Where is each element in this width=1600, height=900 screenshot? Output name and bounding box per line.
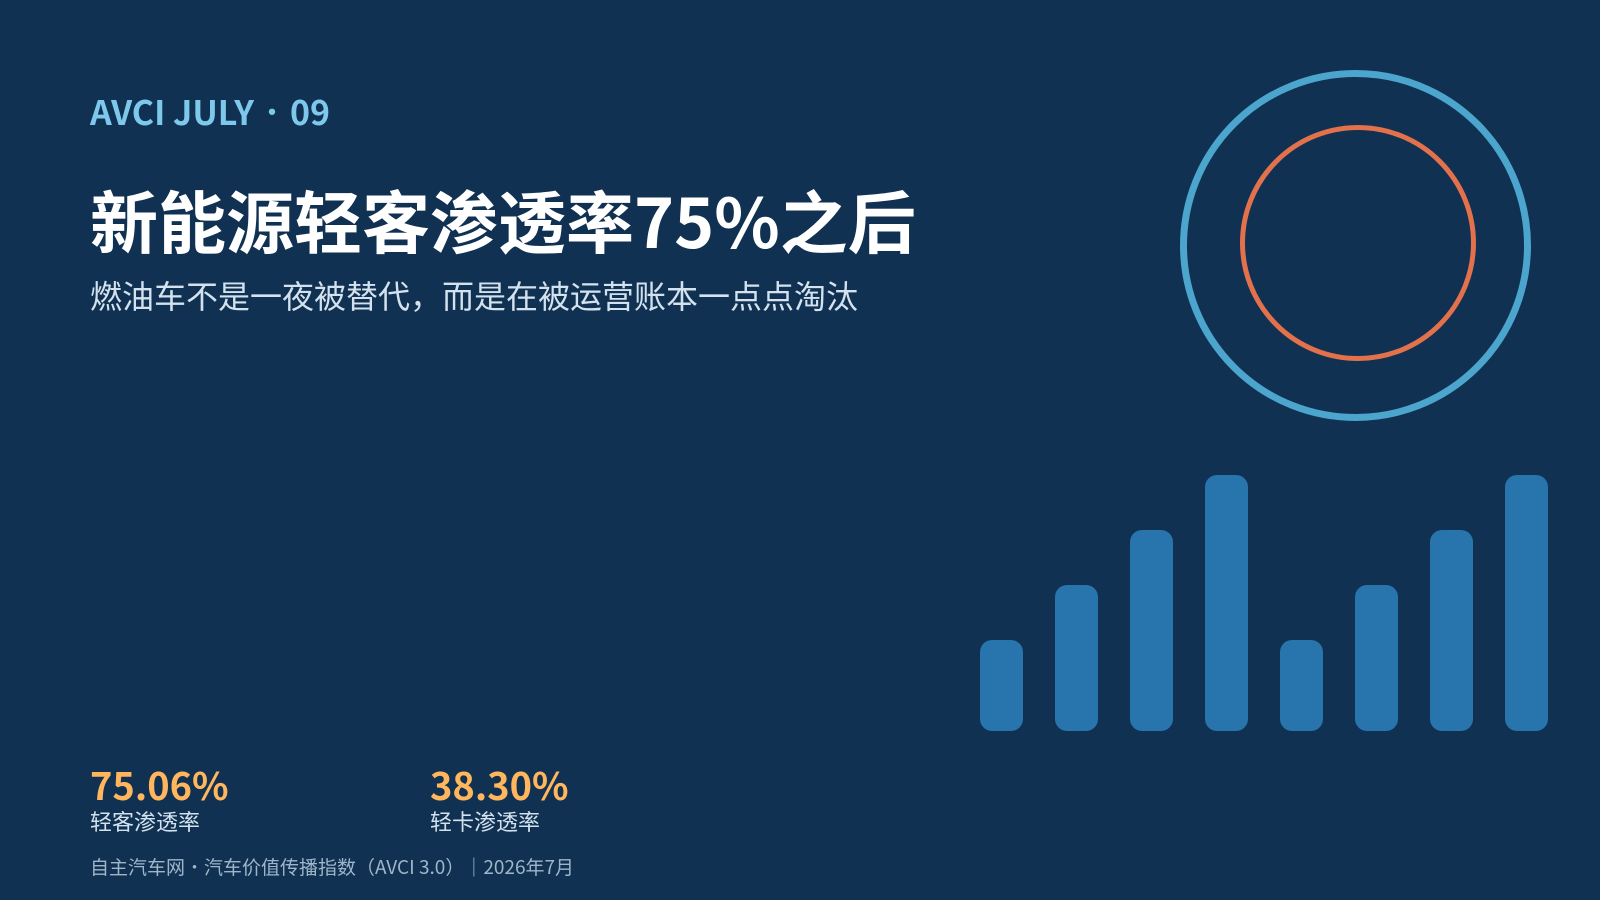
stat: light passenger penetration label: 轻客渗透率: [90, 805, 200, 837]
stat: light passenger penetration value: 75.06%: [90, 756, 229, 811]
bar 4: [1205, 475, 1248, 731]
footer source: 自主汽车网・汽车价值传播指数（AVCI 3.0）｜2026年7月: [90, 853, 574, 880]
title: 新能源轻客渗透率75%之后: [90, 169, 916, 268]
decorative rings: [1180, 70, 1531, 421]
bar 1: [980, 640, 1023, 731]
subtitle: 燃油车不是一夜被替代，而是在被运营账本一点点淘汰: [90, 272, 858, 318]
bar 7: [1430, 530, 1473, 731]
bar 2: [1055, 585, 1098, 731]
bar 3: [1130, 530, 1173, 731]
inner ring: [1240, 125, 1476, 361]
bar 8: [1505, 475, 1548, 731]
kicker: AVCI JULY・09: [90, 86, 330, 135]
bar 6: [1355, 585, 1398, 731]
decorative bar chart: [980, 475, 1548, 731]
stat: light truck penetration value: 38.30%: [430, 756, 569, 811]
stat: light truck penetration label: 轻卡渗透率: [430, 805, 540, 837]
bar 5: [1280, 640, 1323, 731]
outer ring: [1180, 70, 1531, 421]
